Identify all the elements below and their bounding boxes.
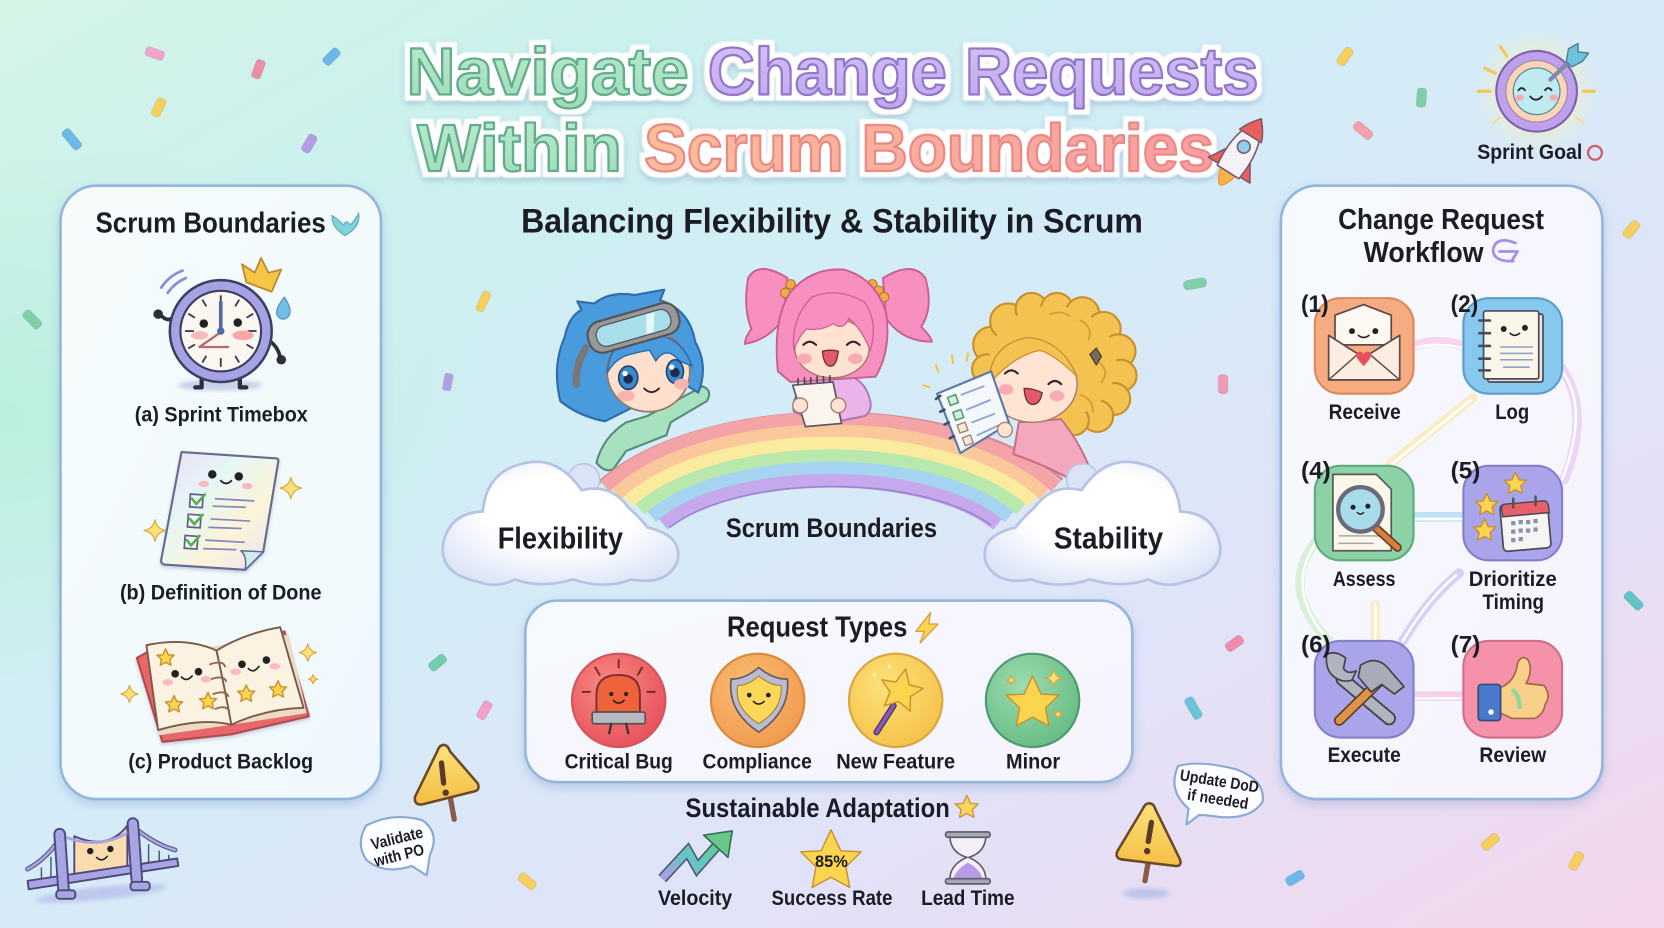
icon: new feature wand bbox=[849, 654, 942, 747]
callout: validate with PO: with PO bbox=[372, 842, 426, 871]
section: sustainable adaptation bbox=[658, 793, 1015, 910]
title: Within bbox=[417, 111, 622, 186]
icon: warning sign bbox=[1117, 803, 1181, 899]
step 2: log bbox=[1451, 291, 1562, 424]
character: pink-haired girl bbox=[745, 269, 932, 427]
icon: small red circle bbox=[1588, 146, 1602, 160]
heading: change request workflow: Change Request bbox=[1338, 204, 1544, 236]
icon: winged heart bbox=[332, 213, 359, 236]
label: definition of done: (b) Definition of Done bbox=[120, 582, 322, 605]
value: 85 percent: 85% bbox=[815, 852, 848, 871]
rainbow arch bbox=[599, 413, 1062, 527]
illustration: rainbow scene bbox=[443, 269, 1220, 585]
label: drioritize timing: Timing bbox=[1483, 591, 1544, 614]
title: Scrum Boundaries bbox=[644, 111, 1214, 186]
label: scrum boundaries under arch: Scrum Boundaries bbox=[726, 513, 937, 543]
heading: scrum boundaries: Scrum Boundaries bbox=[96, 207, 326, 239]
icon: clock mascot bbox=[153, 258, 290, 391]
workflow connectors bbox=[1300, 342, 1577, 698]
label: sprint goal: Sprint Goal bbox=[1477, 141, 1582, 164]
cloud: flexibility bbox=[443, 462, 678, 585]
step 5: prioritize timing bbox=[1451, 458, 1562, 614]
icon: lightning bolt bbox=[916, 612, 938, 643]
step number 7: (7) bbox=[1451, 632, 1480, 659]
step number 4: (4) bbox=[1301, 458, 1331, 485]
label: compliance: Compliance bbox=[703, 750, 812, 773]
label: lead time: Lead Time bbox=[921, 887, 1015, 910]
title bbox=[406, 34, 1259, 186]
warning sign with bubble: validate with PO bbox=[361, 745, 479, 875]
heading: request types: Request Types bbox=[727, 612, 907, 644]
callout: update DoD if needed: if needed bbox=[1186, 787, 1249, 813]
icon: bridge mascot bbox=[28, 818, 178, 907]
step 7: review bbox=[1451, 632, 1562, 767]
icon: definition of done checklist bbox=[144, 452, 302, 570]
icon: rocket bbox=[1199, 106, 1282, 197]
panel: change request workflow bbox=[1281, 186, 1602, 799]
icon: compliance shield bbox=[711, 654, 804, 747]
panel: request types bbox=[525, 601, 1132, 782]
heading: change request workflow bbox=[1338, 204, 1544, 269]
label: critical bug: Critical Bug bbox=[565, 750, 673, 773]
label: product backlog: (c) Product Backlog bbox=[128, 750, 313, 773]
label: log: Log bbox=[1495, 401, 1529, 424]
icon: lead time hourglass bbox=[946, 832, 990, 884]
step number 2: (2) bbox=[1451, 291, 1478, 318]
label: assess: Assess bbox=[1333, 568, 1395, 591]
label: minor: Minor bbox=[1006, 750, 1060, 773]
label: review: Review bbox=[1479, 744, 1547, 767]
label: stability: Stability bbox=[1054, 521, 1163, 556]
label: receive: Receive bbox=[1329, 401, 1401, 424]
icon: product backlog book bbox=[120, 627, 318, 742]
character: curly blonde girl bbox=[923, 293, 1137, 486]
step number 5: (5) bbox=[1451, 458, 1480, 485]
callout: validate with PO bbox=[361, 817, 434, 875]
label: velocity: Velocity bbox=[658, 887, 732, 910]
label: drioritize timing bbox=[1469, 568, 1557, 614]
panel: scrum boundaries bbox=[61, 186, 381, 799]
step number 6: (6) bbox=[1301, 632, 1331, 659]
callout: update DoD if needed: Update DoD bbox=[1179, 767, 1260, 797]
icon: success rate star bbox=[801, 830, 861, 887]
step 1: receive bbox=[1301, 291, 1414, 424]
label: execute: Execute bbox=[1328, 744, 1401, 767]
cloud: stability bbox=[985, 462, 1220, 585]
icon: minor star bbox=[986, 654, 1079, 747]
label: sprint timebox: (a) Sprint Timebox bbox=[135, 403, 308, 426]
icon: small star bbox=[955, 795, 978, 817]
character: blue-haired boy bbox=[557, 290, 709, 470]
label: new feature: New Feature bbox=[836, 750, 955, 773]
icon: critical bug siren bbox=[572, 654, 665, 747]
icon: velocity arrow bbox=[662, 831, 732, 879]
icon: target bbox=[1475, 30, 1598, 153]
label: flexibility: Flexibility bbox=[498, 521, 623, 556]
callout: update DoD if needed bbox=[1174, 764, 1263, 825]
title: Navigate bbox=[406, 34, 689, 109]
step number 1: (1) bbox=[1301, 291, 1329, 318]
icon: cycle arrows bbox=[1493, 240, 1518, 261]
heading: change request workflow: Workflow bbox=[1364, 237, 1484, 269]
warning sign with bubble: update DoD bbox=[1117, 764, 1263, 899]
title: Change Requests bbox=[708, 34, 1259, 109]
step 6: execute bbox=[1301, 632, 1414, 767]
label: success rate: Success Rate bbox=[772, 887, 893, 910]
label: drioritize timing: Drioritize bbox=[1469, 568, 1557, 591]
heading: balancing flexibility and stability: Balancing Flexibility & Stability in Scrum bbox=[521, 202, 1143, 240]
step 4: assess bbox=[1301, 458, 1414, 591]
sprint goal badge bbox=[1475, 30, 1602, 164]
heading: sustainable adaptation: Sustainable Adaptation bbox=[686, 793, 950, 823]
icon: warning sign bbox=[415, 745, 479, 819]
callout: validate with PO: Validate bbox=[369, 824, 425, 854]
